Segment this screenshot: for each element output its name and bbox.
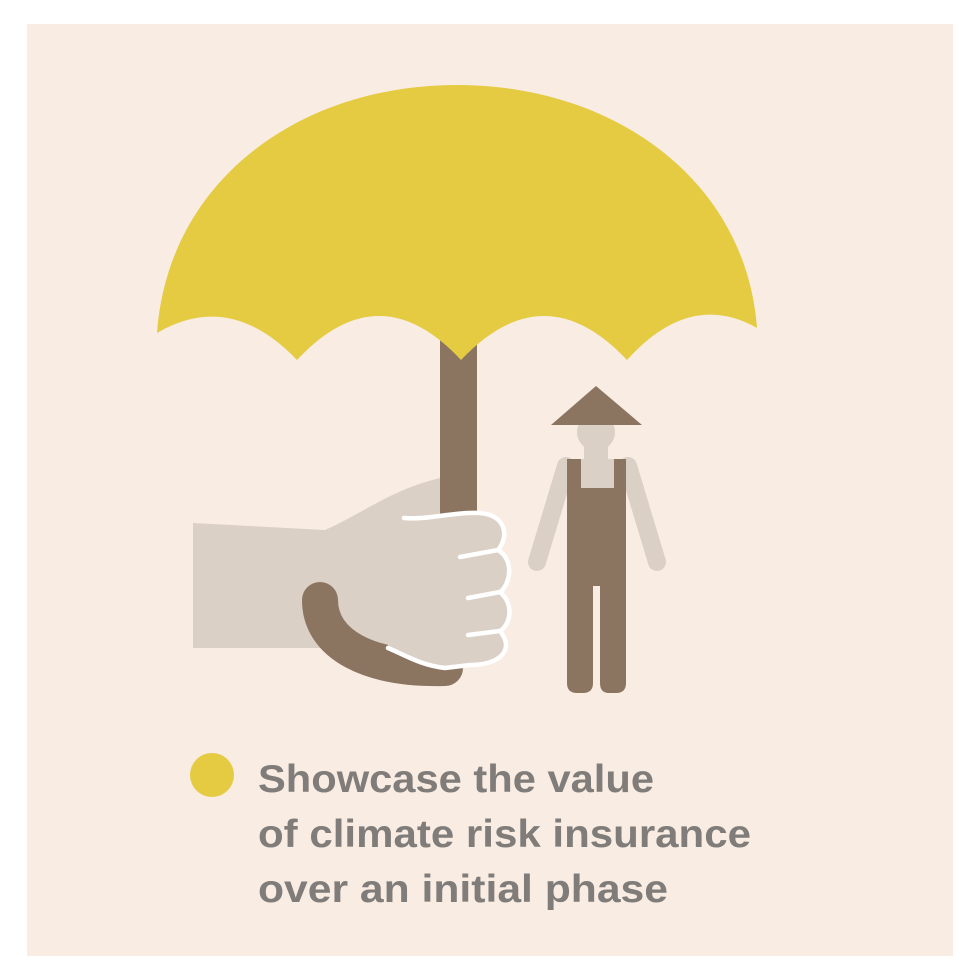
farmer bib <box>581 459 614 488</box>
farmer head <box>577 413 615 451</box>
text block: caption <box>258 758 751 911</box>
farmer hat <box>551 386 642 425</box>
text block: caption: of climate risk insurance <box>258 813 751 856</box>
text block: caption: over an initial phase <box>258 868 668 911</box>
farmer arms <box>537 466 657 562</box>
icon: umbrella handle shaft <box>440 330 477 530</box>
icon: fist <box>387 513 509 668</box>
icon: umbrella hook <box>320 600 445 668</box>
text block: caption: Showcase the value <box>258 758 654 801</box>
icon: umbrella canopy <box>157 85 757 360</box>
icon: farmer <box>537 386 657 693</box>
icon: hand arm <box>193 478 440 648</box>
bullet dot <box>190 753 234 797</box>
farmer overalls <box>567 459 626 693</box>
